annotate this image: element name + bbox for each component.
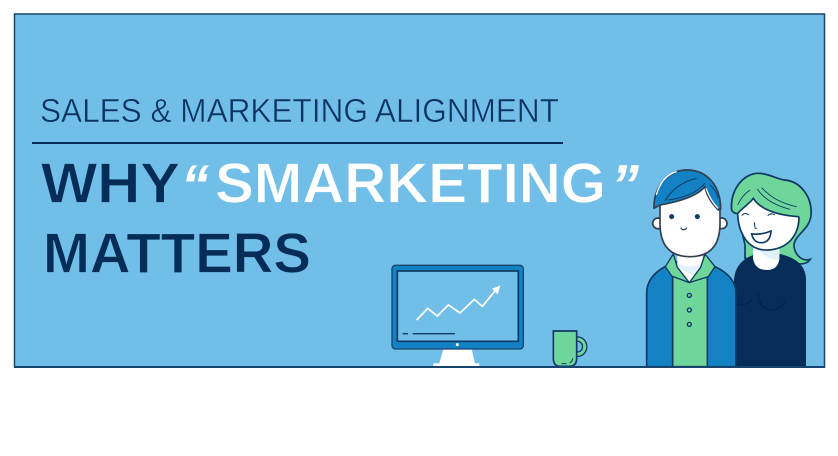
- monitor frame: [392, 265, 523, 349]
- title: line one: ”: [611, 154, 639, 218]
- man smile: [681, 228, 687, 230]
- character: woman: [732, 173, 811, 367]
- panel: blue background: [14, 14, 824, 367]
- icon: green mug: [553, 331, 585, 366]
- title: line one: [41, 152, 639, 218]
- title: line two: MATTERS: [43, 222, 311, 286]
- woman top contour: [736, 292, 785, 310]
- man collar: [665, 254, 715, 283]
- heading: sales and marketing alignment: SALES & MARKETING ALIGNMENT: [40, 92, 559, 129]
- man ears: [653, 218, 727, 229]
- title: line one: “: [181, 154, 209, 218]
- woman dark top: [734, 254, 806, 367]
- monitor screen: [397, 271, 518, 341]
- man neck: [677, 253, 703, 283]
- woman closed eyes: [742, 213, 775, 216]
- man jacket: [647, 262, 736, 367]
- man shirt: [673, 272, 707, 367]
- title rule: [32, 142, 563, 144]
- character: man: [647, 253, 736, 367]
- title: line one: WHY: [41, 152, 180, 216]
- ground line: [14, 366, 825, 368]
- woman fringe: [732, 173, 811, 217]
- woman neck: [753, 245, 779, 270]
- mug shine: [562, 358, 573, 364]
- man hair: [654, 170, 721, 210]
- woman hair strands: [738, 188, 797, 209]
- woman back hair: [732, 173, 811, 264]
- power light: [456, 343, 459, 346]
- man hair strands: [665, 178, 718, 201]
- monitor stand: [433, 349, 479, 367]
- mug body: [553, 331, 577, 366]
- man hair highlight: [656, 172, 718, 208]
- man shirt buttons: [687, 293, 691, 326]
- woman nose: [754, 222, 757, 228]
- rising line chart: [417, 286, 500, 320]
- man head and hair: [653, 170, 727, 257]
- woman smile: [752, 231, 771, 243]
- mug handle: [577, 339, 585, 354]
- title: line one: SMARKETING: [215, 152, 606, 216]
- screen caption lines: [403, 332, 455, 336]
- man eyes: [669, 214, 674, 219]
- icon: desktop monitor with rising chart: [392, 265, 523, 367]
- woman face: [738, 188, 799, 250]
- man head: [660, 185, 720, 257]
